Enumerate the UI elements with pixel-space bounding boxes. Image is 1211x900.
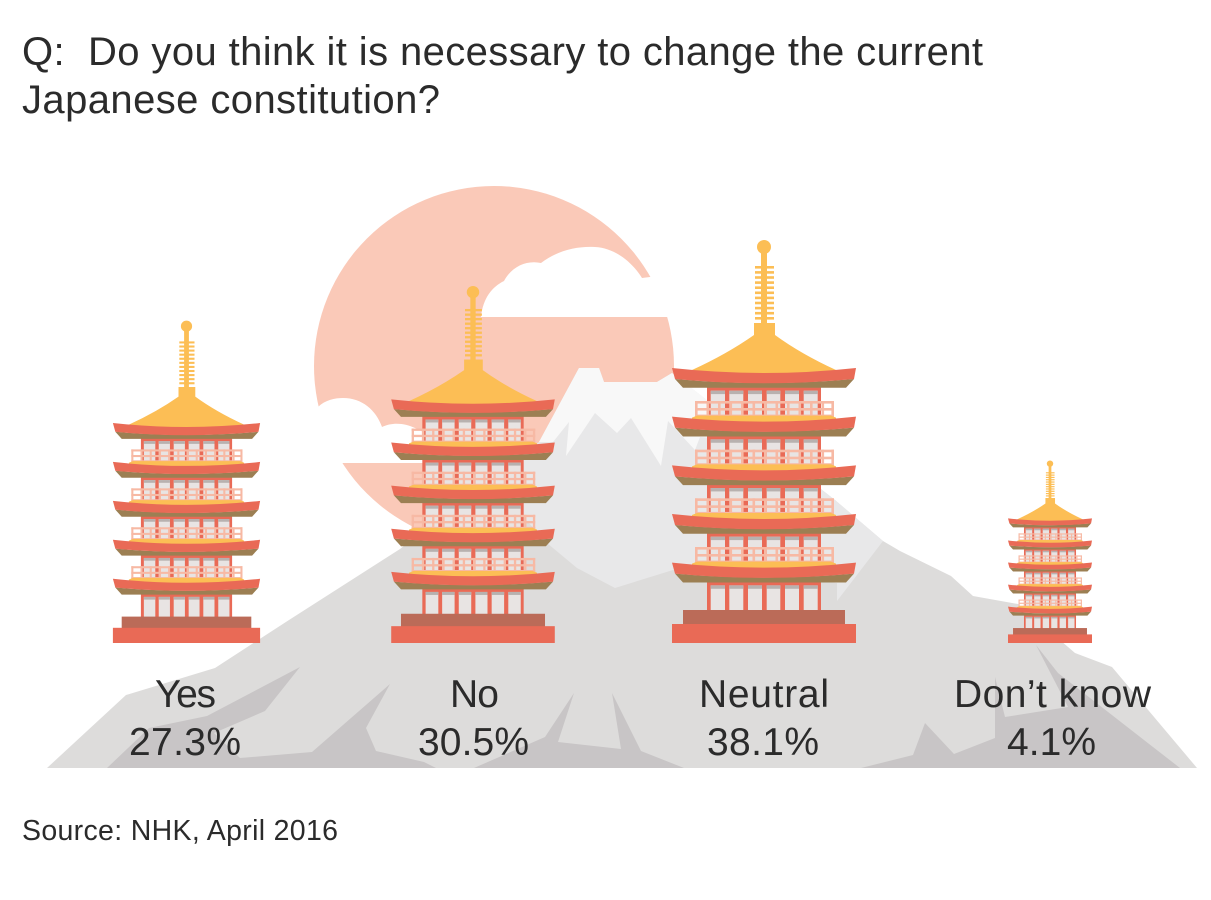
label: No: No [450, 673, 499, 716]
pagoda: No [391, 286, 555, 643]
mountain base [47, 368, 1197, 768]
source note: Source: NHK, April 2016 [22, 815, 338, 847]
sun [314, 186, 674, 546]
rock shadows right [861, 645, 1180, 768]
rock shadows centre [474, 693, 684, 768]
label: Don't know [954, 673, 1152, 764]
label: Yes: 27.3% [129, 721, 241, 764]
pagoda: Yes [113, 321, 260, 643]
title: Japanese constitution? [22, 78, 440, 122]
label: Don't know: Don’t know [954, 673, 1152, 716]
pagoda: Neutral [672, 240, 856, 643]
rock shadows left [107, 667, 436, 768]
title [22, 30, 983, 122]
title: Q: Do you think it is necessary to change the current [22, 30, 983, 74]
mountain [47, 368, 1197, 768]
label: Yes [129, 673, 241, 764]
label: No [418, 673, 529, 764]
label: Neutral [699, 673, 829, 764]
pagoda: Don't know [1008, 460, 1092, 643]
mountain mid slope [490, 368, 883, 601]
cloud: lower left [300, 398, 440, 463]
label: Yes: Yes [155, 673, 216, 716]
snow cap [539, 368, 760, 466]
label: Neutral: 38.1% [707, 721, 819, 764]
label: Neutral: Neutral [699, 673, 829, 716]
cloud: upper right [481, 247, 720, 317]
label: No: 30.5% [418, 721, 529, 764]
label: Don't know: 4.1% [1007, 721, 1096, 764]
